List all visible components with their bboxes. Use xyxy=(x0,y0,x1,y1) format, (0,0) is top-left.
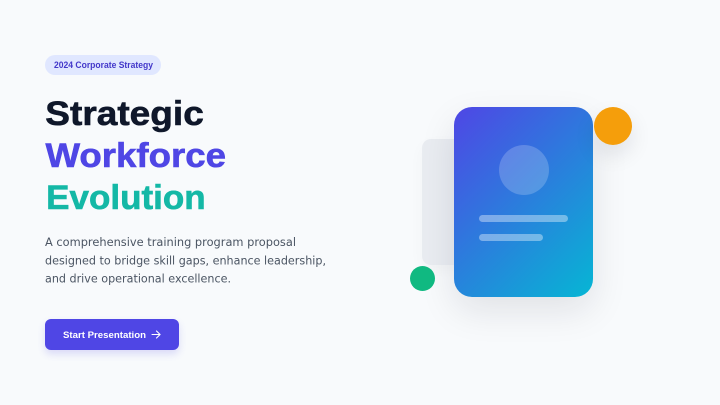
icon: arrow xyxy=(152,331,160,338)
description text: designed to bridge skill gaps, enhance leadership, xyxy=(45,253,326,267)
title: Workforce xyxy=(46,137,226,175)
button: Start Presentation xyxy=(45,319,179,350)
card line short xyxy=(479,234,543,240)
description text xyxy=(45,235,326,286)
description text: A comprehensive training program proposal xyxy=(45,235,296,249)
badge: 2024 Corporate Strategy: 2024 Corporate Strategy xyxy=(54,60,154,70)
main gradient card xyxy=(454,107,593,297)
card avatar circle xyxy=(498,145,548,195)
badge: 2024 Corporate Strategy xyxy=(45,55,161,75)
title: Evolution xyxy=(46,179,206,217)
green circle xyxy=(410,266,435,290)
orange circle xyxy=(594,107,632,145)
description text: and drive operational excellence. xyxy=(45,272,231,286)
card line long xyxy=(479,215,568,222)
title xyxy=(45,95,226,217)
title: Strategic xyxy=(45,95,204,133)
back panel xyxy=(422,139,502,265)
button: Start Presentation: Start Presentation xyxy=(63,330,146,341)
